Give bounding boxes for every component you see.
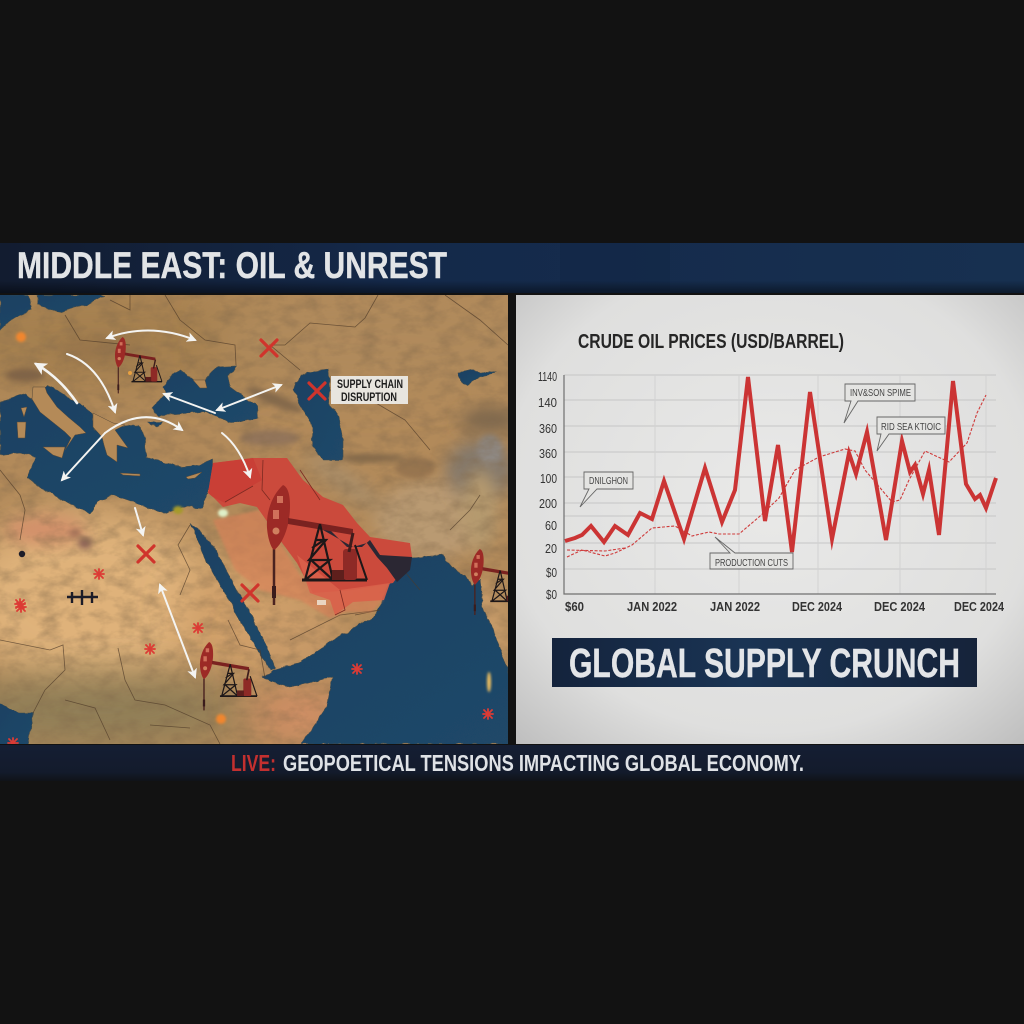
region: red unrest zone [208, 458, 412, 618]
axis labels y [538, 369, 557, 602]
axis labels x: JAN 2022 [627, 599, 677, 614]
icon: oil pump india [471, 549, 508, 615]
header banner [0, 243, 1024, 293]
axis labels x [565, 599, 1005, 614]
chart title: CRUDE OIL PRICES (USD/BARREL) [578, 331, 844, 353]
icon: aircraft cluster [20, 552, 98, 605]
axis labels y: 20 [545, 541, 557, 556]
line chart [538, 369, 1005, 614]
borders [0, 295, 508, 744]
price line [565, 377, 996, 552]
icon: oil pump europe [115, 337, 162, 393]
axis labels x: DEC 2024 [792, 599, 843, 614]
sea: black sea [152, 366, 258, 423]
callout: invasion spike [844, 384, 915, 423]
callout: supply chain disruption [331, 376, 408, 404]
sea: guinea [0, 704, 34, 744]
axis labels x: DEC 2024 [874, 599, 926, 614]
axis labels y: $0 [546, 565, 557, 580]
markers: conflict stars [8, 569, 493, 748]
panel: map [0, 290, 550, 750]
callout: invasion spike: INV&SON SPIME [850, 388, 911, 399]
callout: supply chain disruption: DISRUPTION [341, 390, 397, 404]
callout: red sea attacks [877, 417, 945, 451]
axis labels x: DEC 2024 [954, 599, 1005, 614]
sea: caspian [293, 369, 343, 460]
callout: production cuts: PRODUCTION CUTS [715, 557, 788, 569]
seas [0, 295, 520, 750]
icon: oil pump east africa [200, 642, 257, 710]
axis labels y: $0 [546, 587, 557, 602]
panel: chart [516, 295, 1024, 744]
axis labels y: 100 [540, 471, 557, 486]
sea: mediterranean [0, 385, 213, 515]
axis labels y: 360 [539, 446, 557, 461]
land: islands and peninsulas [17, 380, 207, 479]
footer ticker [0, 745, 1024, 781]
icon: oil pump large [267, 485, 367, 605]
axis labels y: 1140 [538, 369, 557, 384]
sea: atlantic and baltic [0, 295, 104, 330]
axis labels y: 140 [538, 395, 557, 410]
axis labels x: JAN 2022 [710, 599, 760, 614]
sea: marmara [147, 422, 163, 427]
markers: fires [16, 332, 491, 724]
sea: red sea [190, 523, 275, 670]
callout: red sea attacks: RID SEA KTIOIC [881, 422, 941, 433]
axis labels y: 360 [539, 421, 557, 436]
ticker text: GEOPOETICAL TENSIONS IMPACTING GLOBAL ECONOMY. [283, 750, 804, 776]
callout: dnilghon [580, 472, 633, 507]
axis labels y: 200 [539, 496, 557, 511]
callout: production cuts [710, 537, 793, 569]
markers: red x [138, 340, 325, 601]
axis labels x: $60 [565, 599, 584, 614]
sea: arabian [263, 555, 520, 744]
title: MIDDLE EAST: OIL & UNREST [17, 245, 447, 286]
sea: aral [458, 370, 497, 385]
arrows [36, 330, 281, 677]
callout: dnilghon: DNILGHON [589, 476, 628, 487]
callout: supply chain disruption: SUPPLY CHAIN [337, 377, 403, 391]
dashed trend lines [567, 395, 986, 557]
axis labels y: 60 [545, 518, 557, 533]
ticker text: LIVE: [231, 750, 276, 776]
terrain texture [0, 295, 508, 744]
